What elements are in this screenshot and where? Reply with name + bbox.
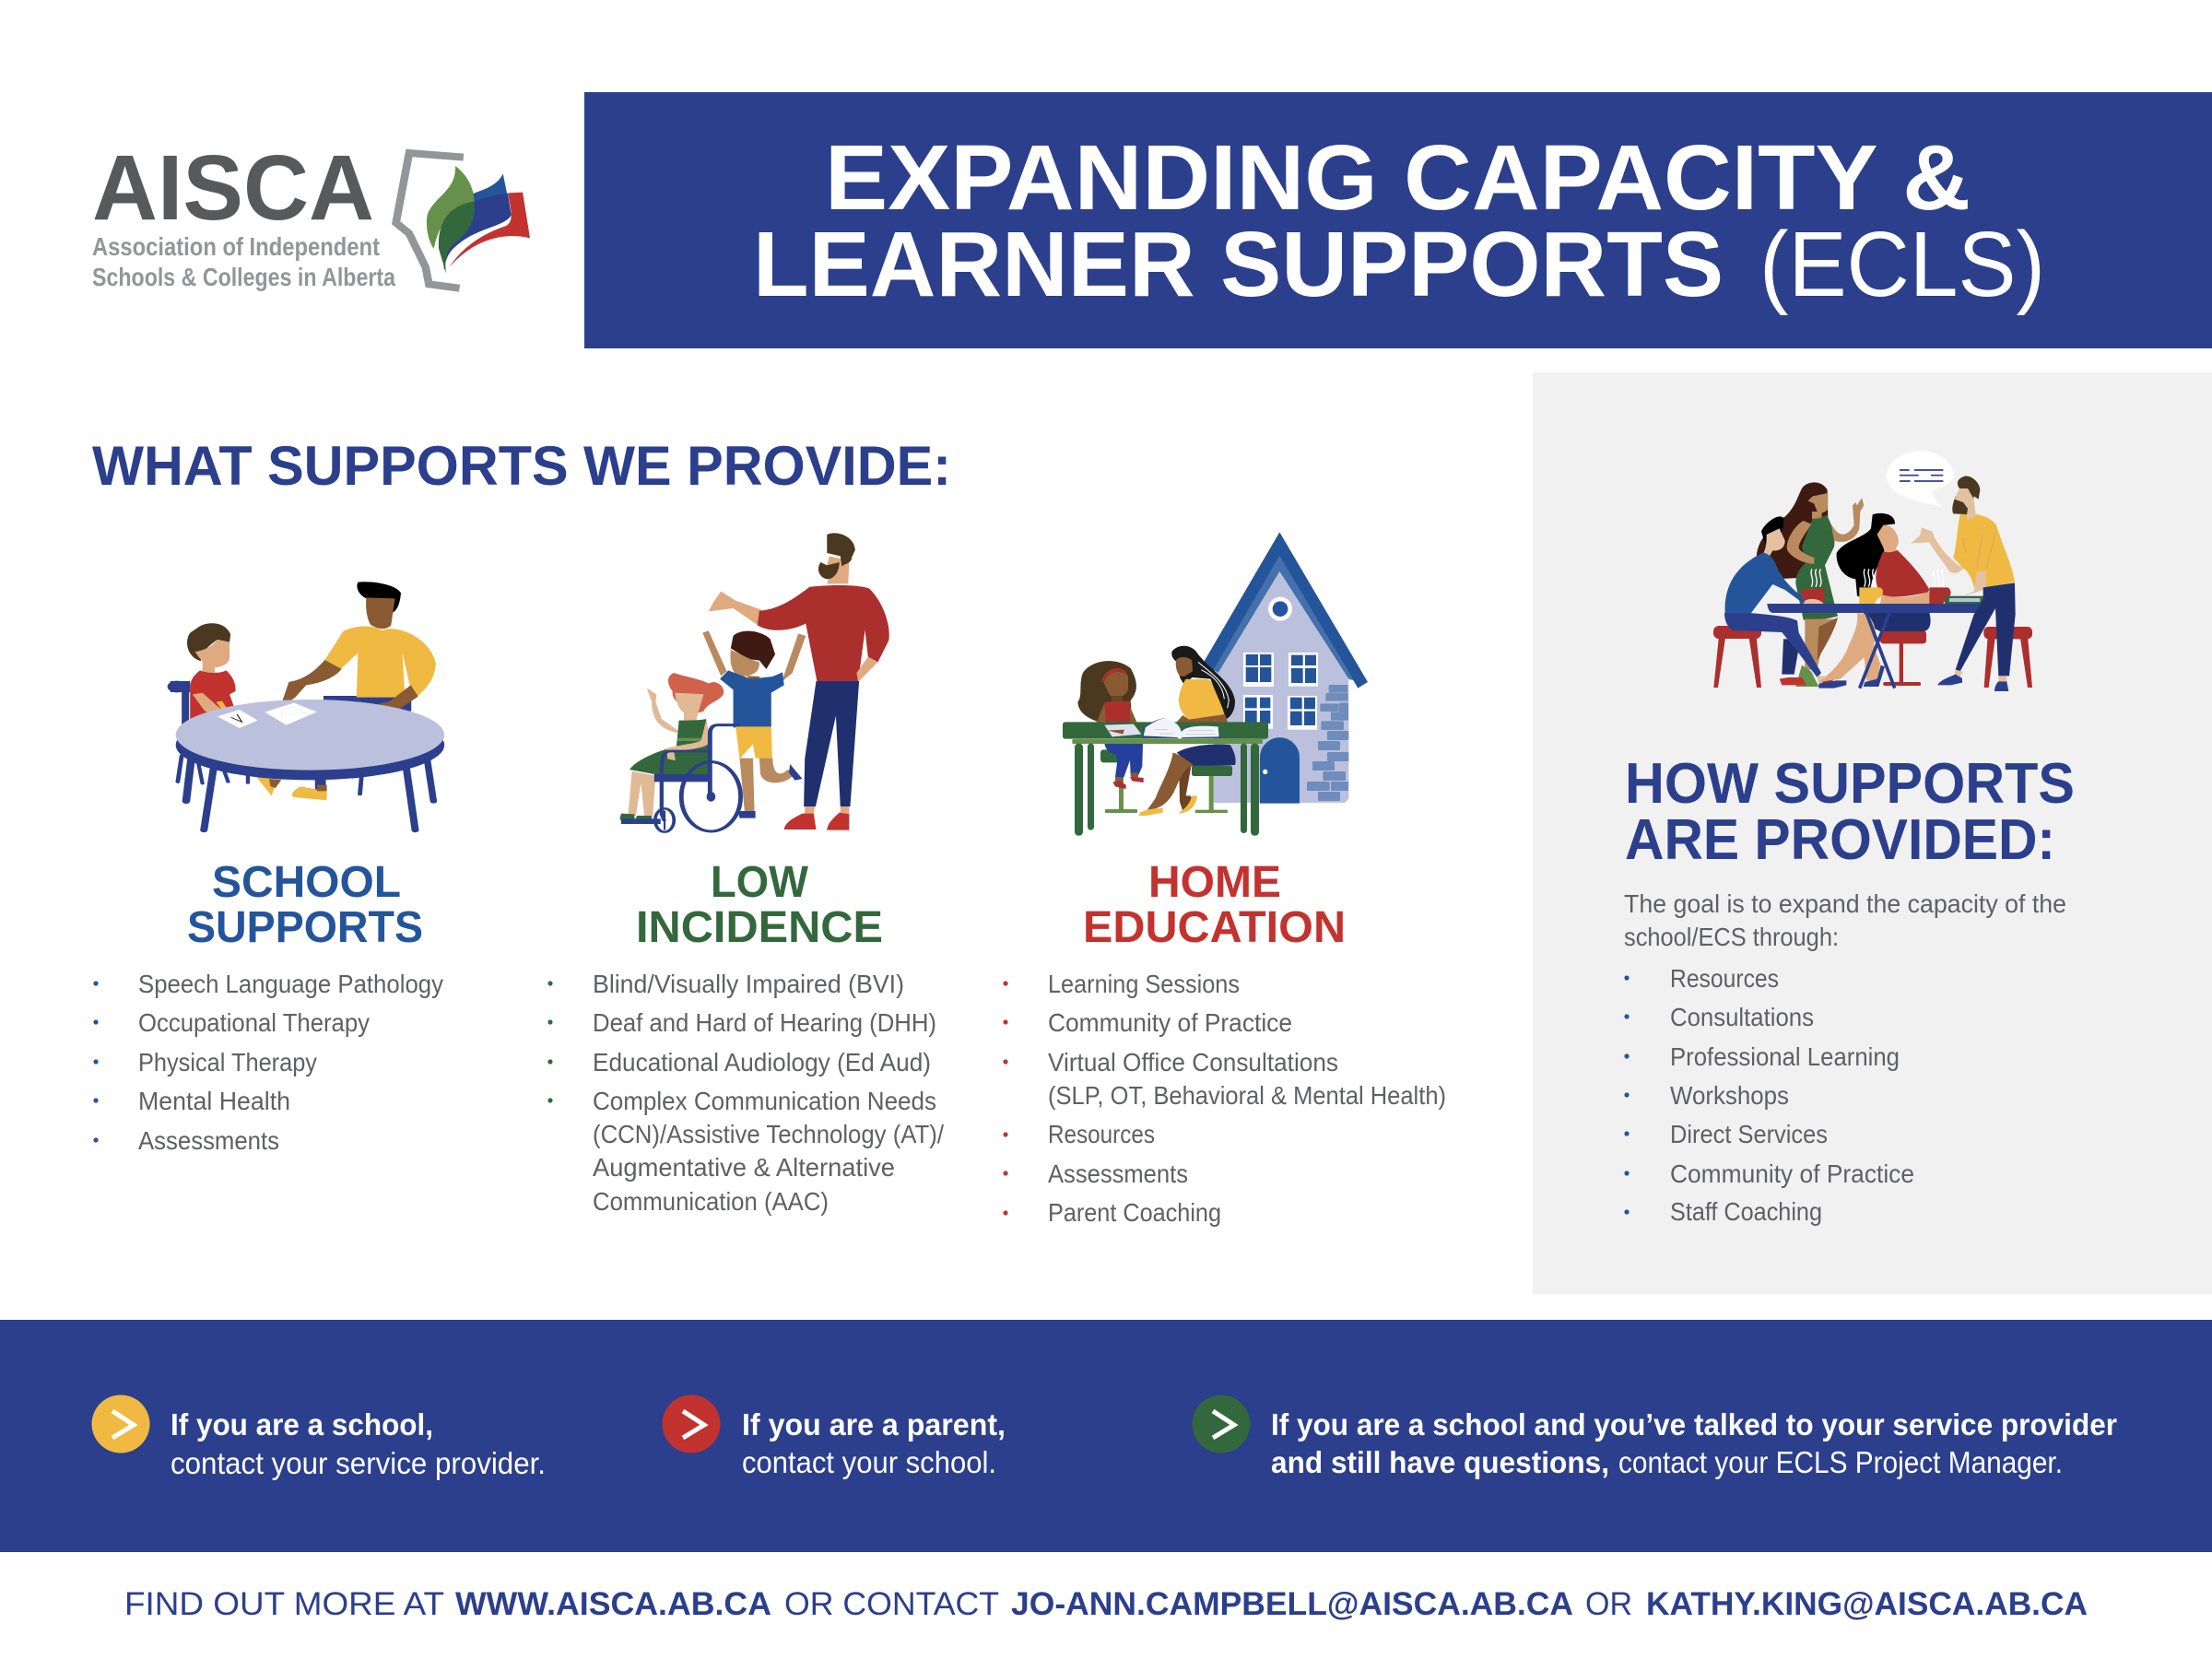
list: low incidence (547, 970, 944, 1216)
title: (ECLS) (1759, 213, 2045, 316)
callout: school: contact your service provider. (171, 1446, 546, 1480)
callout: service provider follow-up: contact your ECLS Project Manager. (1618, 1445, 2063, 1479)
list: how supports are provided: Consultations (1670, 1003, 1814, 1031)
callout: service provider follow-up: and still have questions, (1271, 1445, 1609, 1479)
column heading: home education: EDUCATION (1083, 903, 1346, 952)
heading: how supports are provided: ARE PROVIDED: (1625, 808, 2055, 872)
panel intro text: The goal is to expand the capacity of the (1624, 889, 2066, 918)
list: school supports: Physical Therapy (138, 1048, 317, 1077)
panel intro text: school/ECS through: (1624, 923, 1839, 951)
column heading: home education: HOME (1148, 858, 1281, 907)
logo: AISCA (92, 136, 530, 291)
callout: parent (662, 1395, 1006, 1479)
list: how supports are provided: Resources (1670, 964, 1779, 993)
list: home education: Parent Coaching (1048, 1198, 1221, 1227)
heading: what supports we provide: WHAT SUPPORTS WE PROVIDE: (92, 435, 951, 497)
footer contact line: OR (1585, 1586, 1632, 1622)
list: low incidence: Blind/Visually Impaired (BVI) (593, 970, 904, 998)
illustration: school supports, adult and child at round table (168, 582, 444, 830)
footer contact line: JO-ANN.CAMPBELL@AISCA.AB.CA (1011, 1586, 1573, 1622)
list: home education: Assessments (1048, 1159, 1188, 1188)
list: how supports are provided: Workshops (1670, 1081, 1789, 1110)
column heading: school supports (187, 858, 423, 952)
illustration: low incidence, adult, child and child in wheelchair (619, 533, 889, 832)
footer contact line: FIND OUT MORE AT (124, 1586, 444, 1622)
column heading: low incidence (636, 858, 883, 952)
list: low incidence: Educational Audiology (Ed Aud) (593, 1048, 931, 1077)
list: how supports are provided (1624, 964, 1914, 1226)
column heading: school supports: SUPPORTS (187, 903, 423, 952)
logo emblem: Alberta outline with leaf and flag (396, 153, 530, 288)
column heading: low incidence: INCIDENCE (636, 903, 883, 952)
list: low incidence: Communication (AAC) (593, 1187, 829, 1216)
footer contact line: KATHY.KING@AISCA.AB.CA (1646, 1586, 2088, 1622)
list: how supports are provided: Staff Coaching (1670, 1197, 1822, 1226)
logo tagline: Schools & Colleges in Alberta (92, 263, 395, 291)
illustration: people meeting around a table with speech bubble (1713, 451, 2032, 691)
contact band (0, 1320, 2212, 1552)
heading: how supports are provided (1625, 752, 2075, 872)
title: LEARNER SUPPORTS (753, 213, 1724, 316)
list: home education: Learning Sessions (1048, 970, 1240, 998)
callout: school: If you are a school, (171, 1407, 433, 1441)
list: home education: (SLP, OT, Behavioral & Mental Health) (1048, 1081, 1446, 1110)
list: low incidence: Complex Communication Needs (593, 1087, 936, 1115)
title banner (584, 92, 2212, 348)
list: home education: Virtual Office Consultations (1048, 1048, 1338, 1077)
list: home education (1003, 970, 1446, 1227)
title (753, 126, 2045, 316)
list: low incidence: (CCN)/Assistive Technology (AT)/ (593, 1120, 944, 1148)
footer contact line: OR CONTACT (784, 1586, 999, 1622)
list: how supports are provided: Direct Services (1670, 1120, 1828, 1148)
logo tagline: Association of Independent (92, 232, 380, 261)
logo tagline (92, 232, 395, 291)
panel: how supports are provided (1533, 372, 2212, 1294)
heading: how supports are provided: HOW SUPPORTS (1625, 752, 2075, 816)
callout: parent: If you are a parent, (742, 1407, 1006, 1441)
list: school supports: Occupational Therapy (138, 1008, 370, 1037)
list: school supports: Assessments (138, 1126, 279, 1155)
list: how supports are provided: Community of Practice (1670, 1159, 1914, 1188)
column heading: home education (1083, 858, 1346, 952)
list: school supports (93, 970, 443, 1155)
list: low incidence: Deaf and Hard of Hearing (DHH) (593, 1008, 936, 1037)
list: low incidence: Augmentative & Alternative (593, 1153, 895, 1182)
list: home education: Resources (1048, 1120, 1155, 1148)
callout: service provider follow-up (1193, 1395, 2117, 1479)
footer contact line (124, 1586, 2088, 1622)
title: EXPANDING CAPACITY & (825, 126, 1971, 229)
footer contact line: WWW.AISCA.AB.CA (455, 1586, 771, 1622)
column heading: school supports: SCHOOL (212, 858, 401, 907)
illustration: home education, parent and child at table before house (1063, 532, 1368, 836)
callout: parent: contact your school. (742, 1445, 996, 1479)
column heading: low incidence: LOW (711, 858, 809, 907)
list: school supports: Mental Health (138, 1087, 290, 1115)
logo wordmark: AISCA (92, 136, 374, 240)
callout: school (92, 1395, 546, 1480)
callout: service provider follow-up: If you are a school and you’ve talked to your service provider (1271, 1407, 2117, 1441)
panel intro text (1624, 889, 2066, 951)
list: how supports are provided: Professional Learning (1670, 1042, 1900, 1071)
list: school supports: Speech Language Pathology (138, 970, 443, 998)
list: home education: Community of Practice (1048, 1008, 1292, 1037)
